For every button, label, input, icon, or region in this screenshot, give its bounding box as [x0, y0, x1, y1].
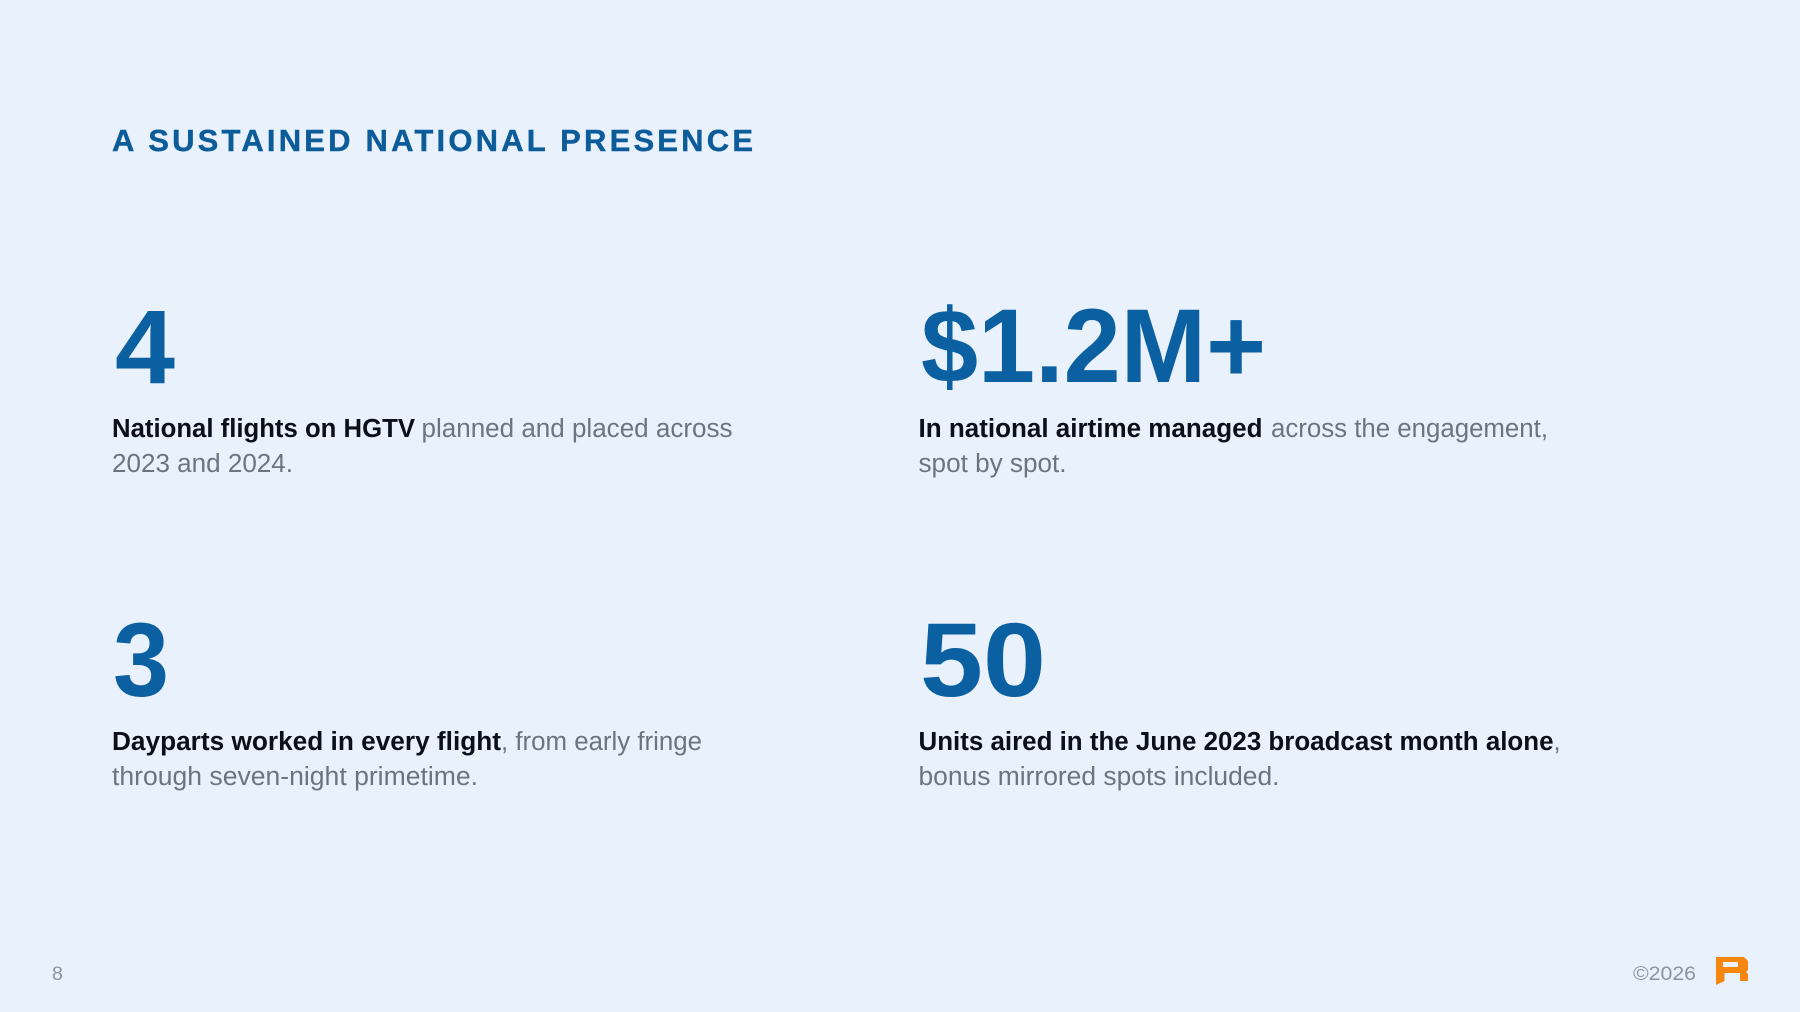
- description: units aired: [918, 728, 1561, 791]
- title: A SUSTAINED NATIONAL PRESENCE: [112, 123, 753, 158]
- description: dayparts: Dayparts worked in every flight: [112, 728, 502, 756]
- icon: orange R logo: [1716, 957, 1748, 985]
- panel: dayparts stat: [112, 602, 702, 791]
- copyright: ©2026: [1633, 963, 1696, 985]
- description: units aired: Units aired in the June 2023 broadcast month alone: [918, 728, 1554, 756]
- description: national flights: planned and placed across: [422, 415, 732, 443]
- description: national airtime: In national airtime managed: [918, 415, 1262, 443]
- number: 4: 4: [115, 289, 175, 406]
- description: national flights: National flights on HGTV: [112, 415, 415, 443]
- description: dayparts: , from early fringe: [501, 728, 702, 756]
- page number: 8: [52, 963, 63, 985]
- panel: national flights stat: [112, 289, 732, 478]
- description: national airtime: spot by spot.: [918, 450, 1066, 478]
- number: $1.2M+: $1.2M+: [921, 288, 1266, 405]
- description: dayparts: [112, 728, 702, 791]
- panel: units aired stat: [918, 602, 1561, 791]
- description: units aired: bonus mirrored spots included.: [918, 763, 1280, 791]
- description: national airtime: across the engagement,: [1271, 415, 1548, 443]
- description: dayparts: through seven-night primetime.: [112, 763, 478, 791]
- description: national flights: [112, 415, 732, 478]
- number: 50: 50: [920, 602, 1046, 719]
- description: units aired: ,: [1554, 728, 1561, 756]
- description: national airtime: [918, 415, 1548, 478]
- panel: national airtime stat: [918, 288, 1548, 478]
- description: national flights: 2023 and 2024.: [112, 450, 293, 478]
- number: 3: 3: [113, 602, 169, 719]
